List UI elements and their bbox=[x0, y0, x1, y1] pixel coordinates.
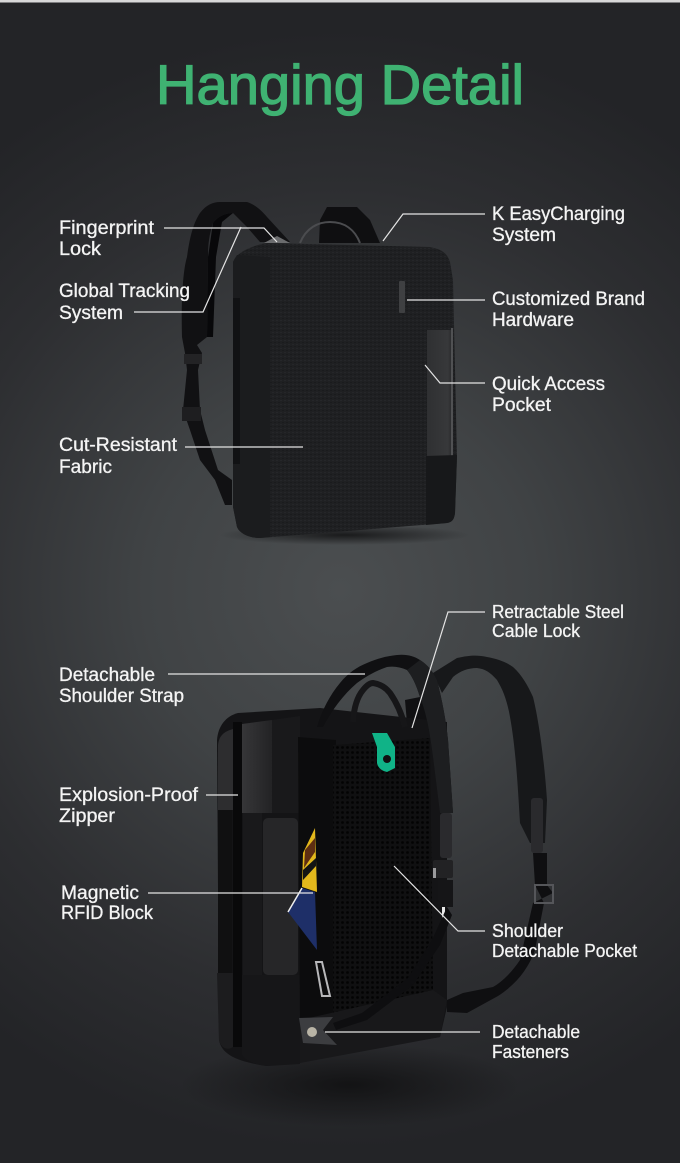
label: detachable fasteners bbox=[492, 1022, 580, 1062]
label: detachable fasteners: Detachable bbox=[492, 1022, 580, 1042]
leader line: global tracking system bbox=[134, 227, 241, 312]
label: shoulder detachable pocket: Detachable Pocket bbox=[492, 941, 637, 961]
green tab bbox=[372, 733, 395, 772]
label: customized brand hardware bbox=[492, 289, 645, 331]
leader line: explosion-proof zipper bbox=[206, 794, 238, 796]
label: magnetic rfid block bbox=[61, 883, 153, 924]
label: cut-resistant fabric: Cut-Resistant bbox=[59, 435, 178, 456]
label: k easycharging system: K EasyCharging bbox=[492, 204, 625, 225]
label: shoulder detachable pocket: Shoulder bbox=[492, 921, 563, 941]
label: magnetic rfid block: Magnetic bbox=[61, 883, 139, 904]
label: retractable steel cable lock: Cable Lock bbox=[492, 621, 581, 641]
label: explosion-proof zipper: Zipper bbox=[59, 806, 116, 827]
leader line: customized brand hardware bbox=[407, 299, 485, 301]
label: cut-resistant fabric: Fabric bbox=[59, 457, 112, 478]
illustration: back of backpack bbox=[180, 655, 553, 1127]
label: detachable shoulder strap bbox=[59, 665, 184, 707]
label: quick access pocket: Pocket bbox=[492, 395, 552, 416]
label: customized brand hardware: Customized Brand bbox=[492, 289, 645, 310]
leader line: shoulder detachable pocket bbox=[394, 866, 485, 931]
label: fingerprint lock: Fingerprint bbox=[59, 218, 155, 239]
label: quick access pocket: Quick Access bbox=[492, 374, 605, 395]
label: magnetic rfid block: RFID Block bbox=[61, 903, 153, 924]
leader line: magnetic rfid block bbox=[148, 892, 313, 894]
leader line: cut-resistant fabric bbox=[185, 446, 303, 448]
pocket cards and passport bbox=[288, 828, 330, 996]
leader line: fingerprint lock bbox=[164, 228, 277, 242]
label: global tracking system: System bbox=[59, 303, 123, 324]
label: cut-resistant fabric bbox=[59, 435, 178, 478]
illustration: front of backpack bbox=[182, 202, 470, 545]
label: fingerprint lock: Lock bbox=[59, 239, 102, 260]
leader line: detachable fasteners bbox=[325, 1031, 480, 1033]
leader line: quick access pocket bbox=[425, 365, 485, 383]
label: detachable shoulder strap: Detachable bbox=[59, 665, 155, 686]
title: Hanging Detail bbox=[156, 53, 524, 116]
far shoulder strap bbox=[433, 656, 553, 1013]
label: detachable shoulder strap: Shoulder Strap bbox=[59, 686, 184, 707]
label: explosion-proof zipper: Explosion-Proof bbox=[59, 785, 199, 806]
near shoulder strap bbox=[317, 655, 453, 813]
handle bbox=[353, 683, 405, 727]
leader line: detachable shoulder strap bbox=[168, 673, 365, 675]
label: retractable steel cable lock bbox=[492, 602, 624, 641]
label: shoulder detachable pocket bbox=[492, 921, 637, 961]
label: global tracking system: Global Tracking bbox=[59, 281, 190, 302]
near strap hardware bbox=[333, 813, 453, 1030]
label: retractable steel cable lock: Retractable Steel bbox=[492, 602, 624, 622]
label: fingerprint lock bbox=[59, 218, 155, 260]
leader line: retractable steel cable lock bbox=[412, 612, 485, 728]
label: detachable fasteners: Fasteners bbox=[492, 1042, 569, 1062]
fastener bbox=[299, 1017, 337, 1045]
label: quick access pocket bbox=[492, 374, 605, 416]
label: customized brand hardware: Hardware bbox=[492, 310, 574, 331]
label: k easycharging system: System bbox=[492, 225, 556, 246]
hard shell side bbox=[217, 716, 300, 1066]
label: k easycharging system bbox=[492, 204, 625, 246]
label: explosion-proof zipper bbox=[59, 785, 199, 827]
leader line: k easycharging system bbox=[383, 214, 485, 241]
label: global tracking system bbox=[59, 281, 190, 324]
